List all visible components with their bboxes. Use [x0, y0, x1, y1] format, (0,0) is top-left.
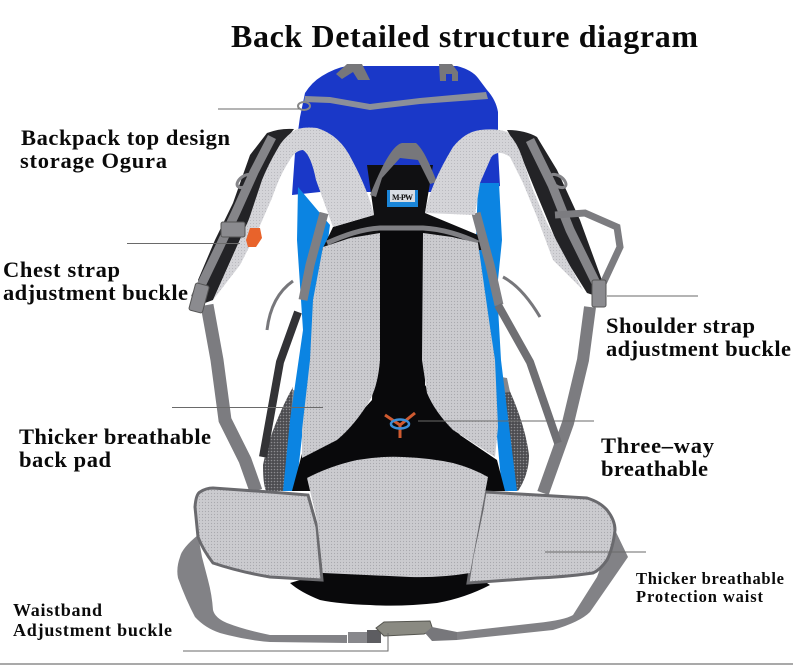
label: waistband buckle: Waistband: [13, 600, 102, 620]
top lid: [292, 64, 500, 195]
label: back pad: [19, 424, 211, 472]
thicker breathable back pad: [302, 233, 498, 458]
brand label: [387, 190, 418, 207]
label: back pad: Thicker breathable: [19, 424, 211, 449]
lower black base: [290, 570, 490, 606]
label: chest strap buckle: Chest strap: [3, 257, 120, 282]
label: chest strap buckle: [3, 257, 188, 305]
label: backpack top design: [20, 125, 230, 173]
label: chest strap buckle: adjustment buckle: [3, 280, 188, 305]
label: three-way breathable: Three–way: [601, 433, 715, 458]
label: back pad: back pad: [19, 447, 111, 472]
left shoulder strap: [189, 128, 374, 491]
label: waistband buckle: [13, 600, 172, 640]
waist belt strap: [177, 530, 628, 643]
bottom rule: [0, 663, 793, 665]
top carry handle: [370, 143, 437, 197]
backpack illustration: [177, 64, 628, 643]
label: shoulder strap buckle: Shoulder strap: [606, 313, 755, 338]
label: shoulder strap buckle: [606, 313, 791, 361]
title: Back Detailed structure diagram: [231, 18, 698, 54]
left hip wing pad: [195, 488, 322, 580]
label: protection waist: [636, 569, 784, 606]
leader lines: [127, 109, 698, 651]
label: protection waist: Protection waist: [636, 587, 764, 606]
mesh side pockets: [263, 376, 529, 491]
label: protection waist: Thicker breathable: [636, 569, 784, 588]
right hip wing pad: [468, 492, 615, 583]
side webbing along back pad: [303, 213, 499, 305]
label: shoulder strap buckle: adjustment buckle: [606, 336, 791, 361]
label: backpack top design: storage Ogura: [20, 148, 167, 173]
label: three-way breathable: breathable: [601, 456, 708, 481]
zipper pulls: [267, 277, 540, 330]
label: three-way breathable: [601, 433, 715, 481]
label: backpack top design: Backpack top design: [21, 125, 230, 150]
orange chest strap buckle: [246, 228, 262, 247]
dark yoke and center harness: [292, 165, 505, 491]
lumbar pad: [307, 457, 488, 577]
waist buckle: [348, 621, 457, 643]
three-way breathable logo: [385, 413, 415, 438]
bright blue body sides: [283, 183, 517, 491]
label: waistband buckle: Adjustment buckle: [13, 620, 172, 640]
right shoulder strap: [425, 129, 620, 493]
brand label: M-PW: [392, 193, 413, 202]
